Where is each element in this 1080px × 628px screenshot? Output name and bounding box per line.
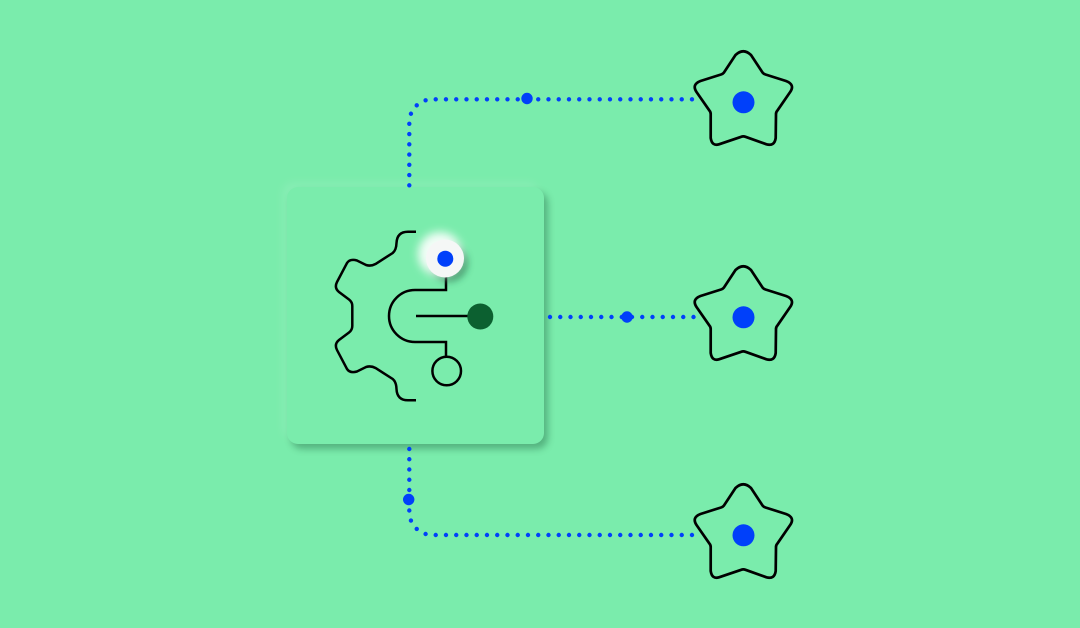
- icon: circuit lines: [389, 277, 468, 357]
- icon: dark green circuit node: [467, 304, 493, 330]
- connector: top dotted line: [409, 93, 697, 185]
- icon: bottom star: [695, 484, 792, 578]
- icon: middle star: [695, 266, 792, 360]
- connector: bottom dotted line: [403, 449, 697, 535]
- icon: highlighted blue node: [418, 232, 468, 282]
- panel: central card: [287, 187, 544, 444]
- icon: half gear outline: [336, 232, 416, 400]
- icon: hollow circuit node: [432, 357, 461, 385]
- connector: middle dotted line: [550, 311, 697, 323]
- icon: top star: [695, 51, 792, 145]
